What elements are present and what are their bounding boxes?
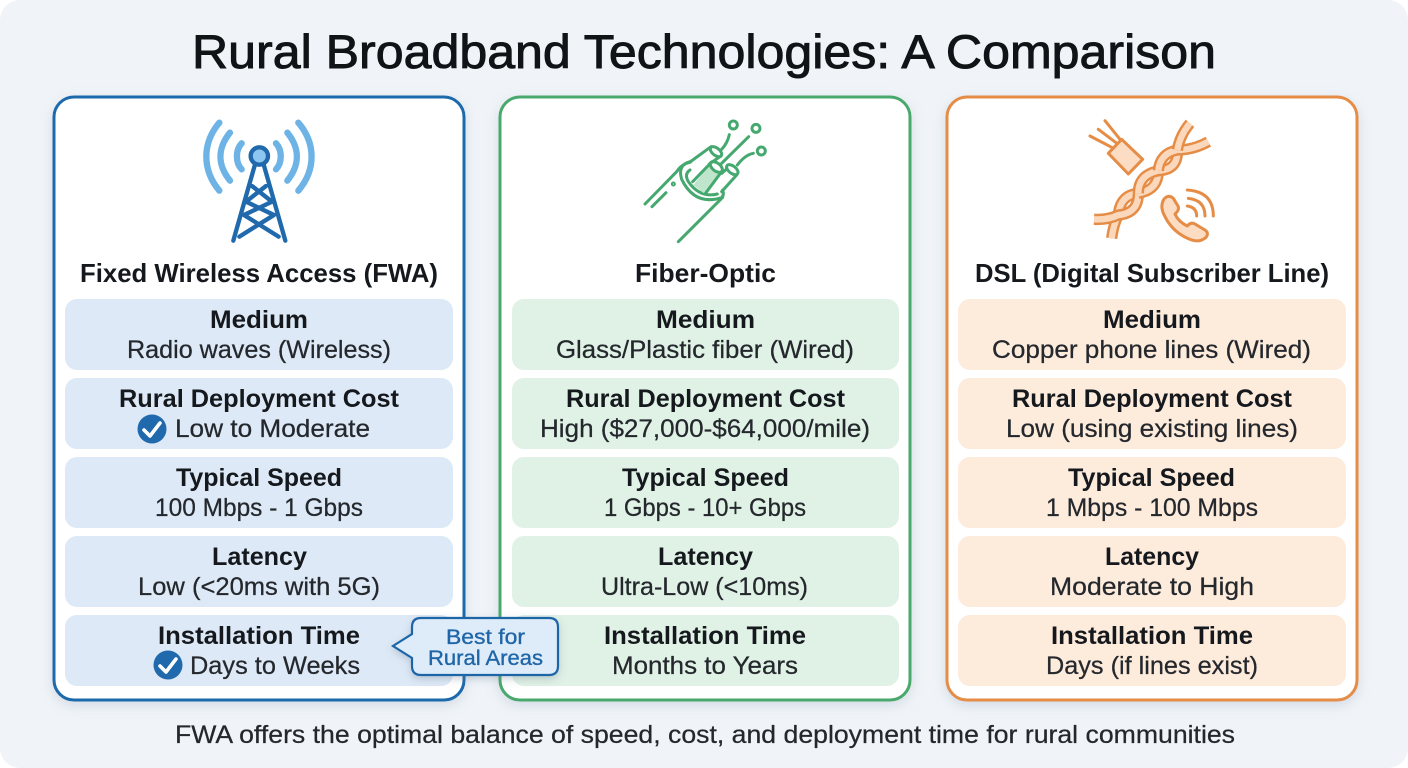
icon: radio tower bbox=[206, 123, 312, 241]
row: medium bbox=[512, 299, 899, 370]
row: installation bbox=[65, 615, 453, 686]
row: latency: Latency bbox=[658, 543, 753, 571]
row: speed: 100 Mbps - 1 Gbps bbox=[155, 494, 363, 522]
row: cost: Rural Deployment Cost bbox=[566, 385, 846, 413]
row: latency: Latency bbox=[1105, 543, 1199, 571]
row: latency: Ultra-Low (<10ms) bbox=[601, 573, 808, 601]
callout: best for rural areas: Best for bbox=[446, 626, 525, 649]
heading: DSL: DSL (Digital Subscriber Line) bbox=[975, 258, 1329, 288]
row: cost bbox=[958, 378, 1346, 449]
icon: check badge bbox=[138, 414, 166, 444]
row: latency: Low (<20ms with 5G) bbox=[138, 573, 380, 601]
callout: best for rural areas: Rural Areas bbox=[428, 647, 543, 670]
row: speed bbox=[512, 457, 899, 528]
icon: fiber cable bbox=[645, 121, 765, 242]
row: medium: Medium bbox=[210, 306, 308, 334]
row: medium: Glass/Plastic fiber (Wired) bbox=[556, 336, 854, 364]
row: installation: Installation Time bbox=[604, 622, 806, 650]
row: cost: Low to Moderate bbox=[175, 415, 370, 443]
row: latency: Latency bbox=[212, 543, 307, 571]
heading: Fiber-Optic: Fiber-Optic bbox=[635, 258, 776, 288]
row: speed bbox=[65, 457, 453, 528]
footer summary: FWA offers the optimal balance of speed, cost, and deployment time for rural communities bbox=[175, 721, 1235, 749]
row: installation: Installation Time bbox=[158, 622, 360, 650]
row: installation bbox=[958, 615, 1346, 686]
row: speed: Typical Speed bbox=[1068, 464, 1235, 492]
row: speed: Typical Speed bbox=[622, 464, 789, 492]
row: installation: Installation Time bbox=[1051, 622, 1253, 650]
row: latency bbox=[65, 536, 453, 607]
icon: check badge bbox=[154, 650, 182, 680]
row: installation bbox=[512, 615, 899, 686]
row: installation: Days (if lines exist) bbox=[1046, 652, 1258, 680]
row: cost: Low (using existing lines) bbox=[1006, 415, 1298, 443]
row: cost bbox=[65, 378, 453, 449]
row: speed bbox=[958, 457, 1346, 528]
row: latency bbox=[958, 536, 1346, 607]
icon: twisted copper pair bbox=[1090, 121, 1213, 241]
row: medium: Radio waves (Wireless) bbox=[127, 336, 391, 364]
row: medium: Medium bbox=[1103, 306, 1201, 334]
row: cost: Rural Deployment Cost bbox=[1012, 385, 1293, 413]
row: latency bbox=[512, 536, 899, 607]
panel: DSL bbox=[947, 97, 1357, 700]
row: installation: Days to Weeks bbox=[190, 652, 360, 680]
row: cost bbox=[512, 378, 899, 449]
row: medium bbox=[65, 299, 453, 370]
panel: Fiber-Optic bbox=[500, 97, 910, 700]
title: Rural Broadband Technologies: A Comparison bbox=[192, 25, 1216, 78]
row: cost: Rural Deployment Cost bbox=[119, 385, 400, 413]
row: latency: Moderate to High bbox=[1050, 573, 1254, 601]
row: medium bbox=[958, 299, 1346, 370]
row: speed: Typical Speed bbox=[176, 464, 342, 492]
callout: best for rural areas bbox=[393, 618, 558, 675]
row: medium: Medium bbox=[656, 306, 755, 334]
row: medium: Copper phone lines (Wired) bbox=[992, 336, 1311, 364]
panel: Fixed Wireless Access bbox=[54, 97, 464, 700]
row: cost: High ($27,000-$64,000/mile) bbox=[540, 415, 870, 443]
row: speed: 1 Gbps - 10+ Gbps bbox=[604, 494, 806, 522]
heading: FWA: Fixed Wireless Access (FWA) bbox=[80, 258, 438, 288]
row: speed: 1 Mbps - 100 Mbps bbox=[1046, 494, 1258, 522]
row: installation: Months to Years bbox=[612, 652, 798, 680]
